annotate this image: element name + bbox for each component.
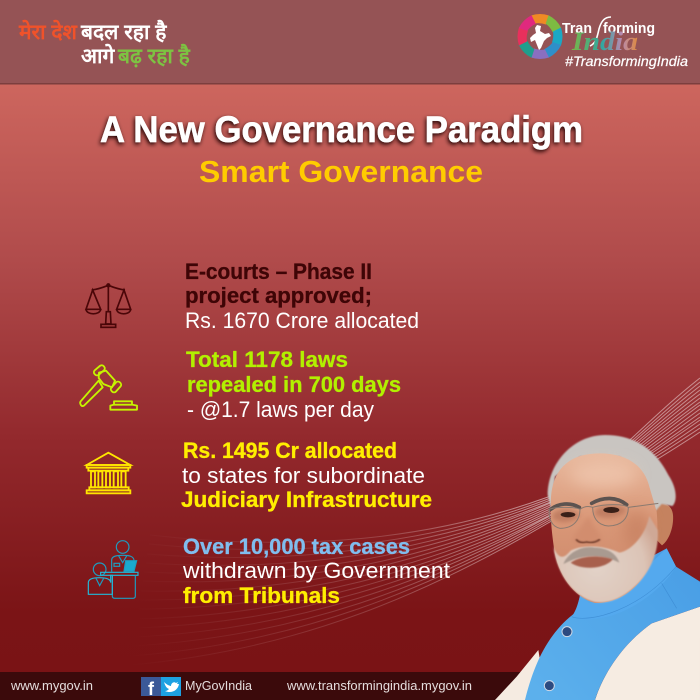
text: tax cases: Over 10,000 tax cases [183,534,410,559]
mustache [563,547,619,564]
icon: people at desk [88,541,138,598]
text: e-courts: project approved; [185,283,372,308]
vest seams [572,567,677,618]
text: judiciary: to states for subordinate [182,463,425,488]
text: laws repealed: repealed in 700 days [187,372,401,397]
hashtag: #TransformingIndia [565,54,689,69]
icon: facebook [141,677,161,699]
footer bar [0,672,700,700]
icon: scales of justice [86,284,131,327]
glasses [549,503,658,528]
text: tax cases: withdrawn by Government [182,558,450,583]
Hindi slogan: मेरा देश [18,19,78,44]
text: laws repealed: - @1.7 laws per day [187,397,374,422]
footer: transforming india site: www.transformingindia.mygov.in [286,678,472,693]
logo wordmark: Tran [562,20,592,37]
India map [530,25,551,50]
logo petal ring [518,14,562,59]
Hindi slogan: बढ़ रहा है [117,43,191,68]
Transforming India logo [518,14,689,69]
nose [573,517,602,544]
text: laws repealed [186,347,401,422]
text: e-courts: Rs. 1670 Crore allocated [185,308,419,333]
vest collar [572,548,676,620]
forehead highlight [570,462,637,488]
icon: gavel [80,364,137,410]
eyes [561,507,619,517]
beard [553,516,658,602]
Hindi slogan: आगे [81,43,115,68]
text: laws repealed: Total 1178 laws [186,347,348,372]
Hindi slogan: बदल रहा है [80,19,167,44]
text: judiciary: Judiciary Infrastructure [181,487,432,512]
text: judiciary [181,438,432,512]
mouth [571,556,613,568]
title: A New Governance Paradigm [100,109,583,150]
eye socket shadow [553,505,627,522]
icon: twitter [161,677,181,696]
vest [525,548,700,700]
logo wordmark: forming [603,20,655,37]
ear [653,503,673,545]
header band [0,0,700,84]
eyebrows [551,498,627,509]
footer: handle: MyGovIndia [185,678,253,693]
text: tax cases: from Tribunals [183,583,340,608]
footer: website: www.mygov.in [10,678,93,693]
item: judiciary infrastructure [87,438,432,512]
buttons [544,627,572,691]
logo wordmark [562,17,655,56]
item: e-courts [86,259,419,333]
text: tax cases [182,534,450,608]
text: e-courts [185,259,419,333]
cheek shadow [623,510,650,550]
hair [548,435,676,512]
item: laws repealed [80,347,401,422]
subtitle: Smart Governance [199,154,483,189]
logo wordmark: India [571,27,638,56]
text: judiciary: Rs. 1495 Cr allocated [183,438,397,463]
icon: facebook: f [148,679,155,699]
text: e-courts: E-courts – Phase II [185,259,372,284]
Hindi slogan [18,19,191,68]
icon: court building [87,453,130,493]
portrait [495,435,700,700]
kurta [495,607,700,700]
decorative wave lines [130,378,700,665]
face [551,453,657,603]
item: tax cases [88,534,450,608]
